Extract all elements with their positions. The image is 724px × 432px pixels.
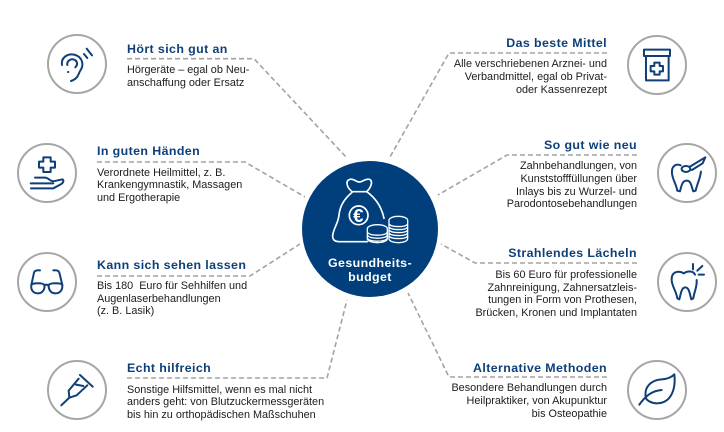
icon: ear: [48, 35, 106, 93]
text block: anders geht: von Blutzuckermessgeräten: [127, 396, 324, 408]
heading: In guten Händen: [97, 144, 200, 158]
text block: Sonstige Hilfsmittel, wenn es mal nicht: [127, 384, 312, 396]
budget label: Gesundheits-: [328, 256, 412, 270]
heading: Kann sich sehen lassen: [97, 258, 246, 272]
icon: glasses: [18, 253, 76, 311]
connector: aids: [127, 300, 347, 378]
text block: Bis 180 Euro für Sehhilfen und: [97, 280, 247, 292]
connector: therapy: [97, 162, 305, 197]
text block: (z. B. Lasik): [97, 305, 154, 317]
heading: Das beste Mittel: [506, 36, 607, 50]
panel: hearing: [48, 35, 250, 93]
text block: Besondere Behandlungen durch: [451, 382, 607, 394]
heading: Echt hilfreich: [127, 361, 211, 375]
heading: So gut wie neu: [544, 138, 637, 152]
text block: Krankengymnastik, Massagen: [97, 179, 242, 191]
panel: aids: [48, 361, 324, 421]
text block: Bis 60 Euro für professionelle: [495, 269, 637, 281]
icon: hand with cross: [18, 144, 76, 202]
text block: Hörgeräte – egal ob Neu-: [127, 64, 249, 76]
panel: alternative methods: [451, 361, 686, 420]
text block: Alle verschriebenen Arznei- und: [454, 58, 607, 70]
central budget circle: [302, 161, 438, 297]
icon: tooth with tool: [658, 144, 716, 202]
central budget circle: budget: [348, 270, 392, 284]
text block: bis hin zu orthopädischen Maßschuhen: [127, 409, 316, 421]
panel: dental treatment: [507, 138, 716, 210]
connector: hearing: [127, 59, 347, 158]
text block: oder Kassenrezept: [516, 84, 607, 96]
panel: glasses: [18, 253, 247, 317]
connector: dental treatment: [438, 155, 637, 195]
panel: medicine: [454, 36, 686, 96]
text block: Augenlaserbehandlungen: [97, 293, 221, 305]
text block: Brücken, Kronen und Implantaten: [475, 307, 637, 319]
connector: medicine: [390, 53, 607, 157]
connector: glasses: [97, 244, 300, 276]
text block: Zahnbehandlungen, von: [520, 160, 637, 172]
text block: Verbandmittel, egal ob Privat-: [465, 71, 607, 83]
heading: Alternative Methoden: [473, 361, 607, 375]
text block: Parodontosebehandlungen: [507, 198, 637, 210]
connector: smile: [441, 244, 637, 263]
text block: bis Osteopathie: [532, 408, 607, 420]
text block: Inlays bis zu Wurzel- und: [516, 186, 637, 198]
text block: anschaffung oder Ersatz: [127, 77, 244, 89]
icon: crutch: [48, 361, 106, 419]
heading: Hört sich gut an: [127, 42, 228, 56]
connector: alternative methods: [408, 293, 607, 377]
heading: Strahlendes Lächeln: [508, 246, 637, 260]
icon: medicine jar: [628, 36, 686, 94]
text block: Zahnreinigung, Zahnersatzleis-: [488, 282, 637, 294]
text block: tungen in Form von Prothesen,: [488, 294, 637, 306]
text block: und Ergotherapie: [97, 192, 180, 204]
icon: leaf: [628, 361, 686, 419]
text block: Kunststofffüllungen über: [520, 173, 637, 185]
panel: smile: [475, 246, 716, 319]
icon: shining tooth: [658, 253, 716, 311]
panel: therapy: [18, 144, 242, 204]
icon: money bag with coins: €: [353, 205, 364, 226]
text block: Verordnete Heilmittel, z. B.: [97, 167, 225, 179]
text block: Heilpraktiker, von Akupunktur: [467, 395, 607, 407]
